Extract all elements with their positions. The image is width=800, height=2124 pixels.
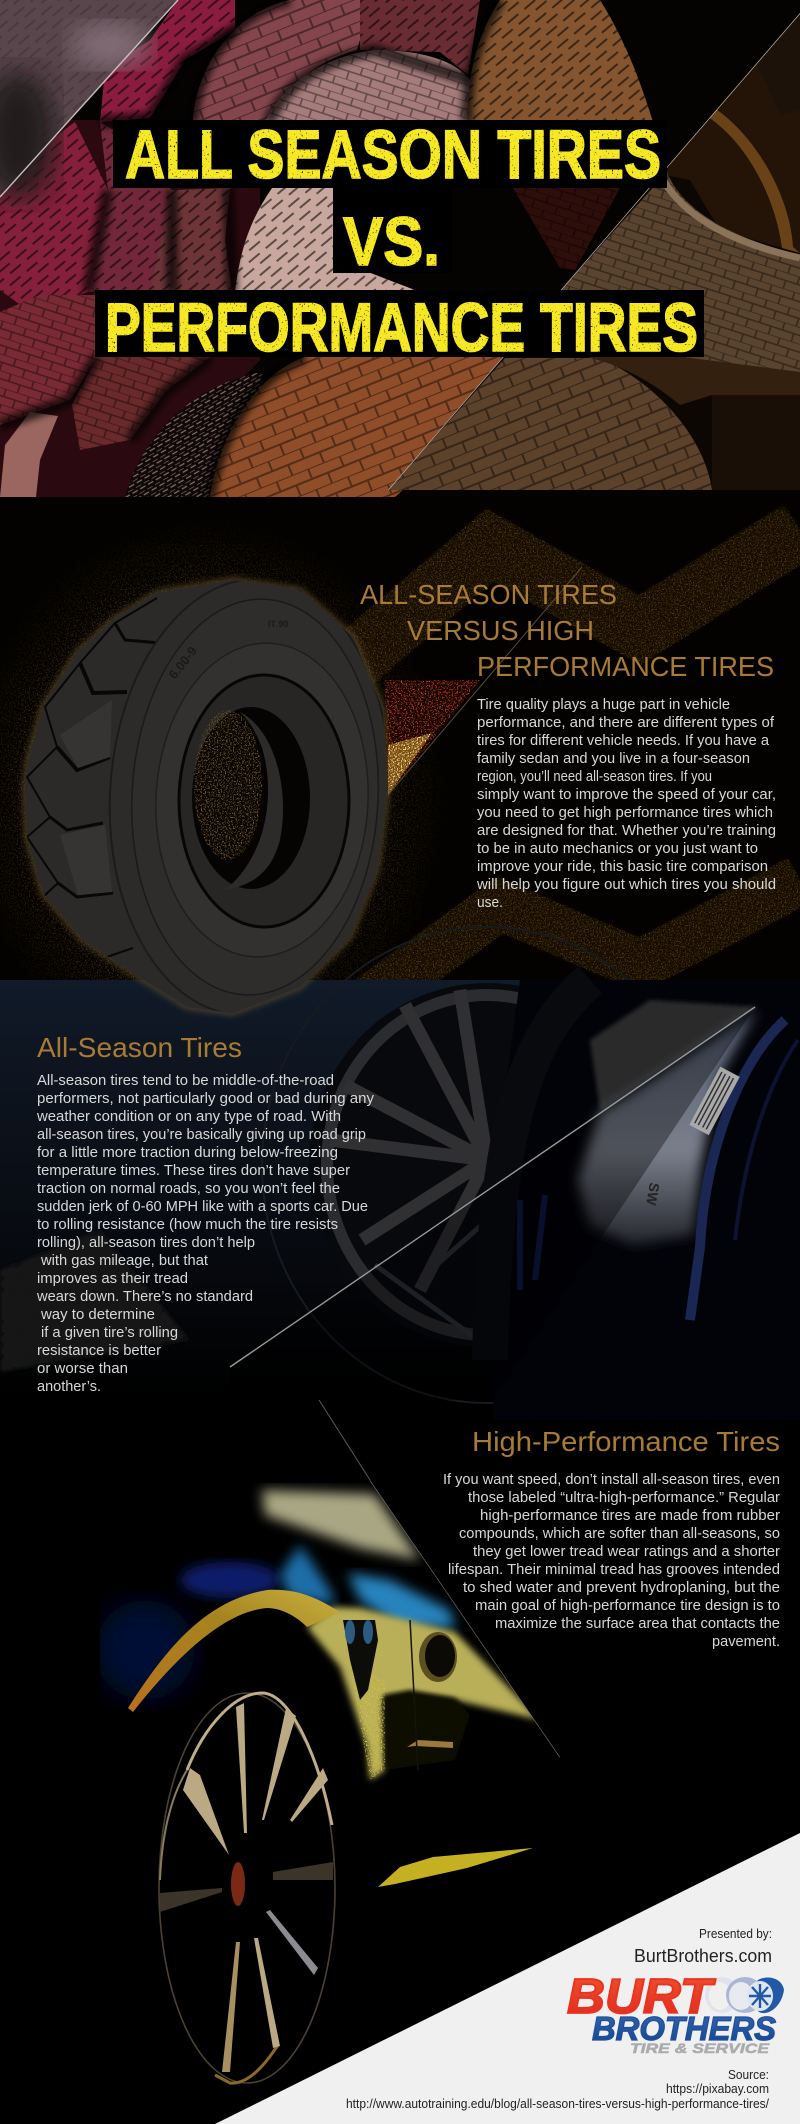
fender lower spatter — [383, 1690, 470, 1770]
rim on right — [490, 980, 800, 1420]
heading: intro: PERFORMANCE TIRES — [477, 651, 774, 682]
text block: high-performance tires: high-performance tires are made from rubber — [480, 1508, 780, 1524]
tire: pink bottom left — [0, 412, 58, 497]
rim on right: SW — [643, 1181, 663, 1207]
tire: dark connecting band — [590, 357, 800, 405]
tire: far left crimson — [0, 122, 108, 312]
title line 2: VS. — [343, 203, 440, 280]
overlay: top-left grey panel — [0, 0, 178, 200]
text block: all-season tires: All-season tires tend to be middle-of-the-road — [37, 1073, 334, 1089]
text block: intro: region, you’ll need all-season tires. If you — [477, 769, 712, 785]
text block: all-season tires — [36, 1073, 375, 1395]
text block: all-season tires: temperature times. These tires don’t have super — [37, 1163, 350, 1179]
text block: high-performance tires: If you want speed, don’t install all-season tires, even — [443, 1472, 780, 1488]
icon: large tire: IT 90 — [268, 619, 289, 629]
tire: lower second — [72, 357, 210, 450]
icon: large tire: 6.00-9 — [166, 644, 200, 682]
tire: crimson top left — [100, 0, 235, 122]
line above car panel — [319, 1400, 370, 1480]
tire sidewall — [108, 580, 384, 1012]
heading: intro: VERSUS HIGH — [407, 615, 594, 646]
tire: inner wheel well — [665, 0, 800, 253]
text block: intro: will help you figure out which tires you should — [476, 877, 776, 893]
panel: footer — [215, 1833, 800, 2124]
tire: large tan tyre — [561, 172, 800, 373]
tire: orange bottom centre — [210, 357, 505, 497]
text block: all-season tires: way to determine — [40, 1307, 155, 1323]
text block: all-season tires: or worse than — [37, 1361, 128, 1377]
text block: intro: simply want to improve the speed of your car, — [477, 787, 776, 803]
text block: intro: are designed for that. Whether you’re training — [477, 823, 776, 839]
divider line — [370, 1480, 560, 1757]
presented by: Presented by: — [699, 1927, 772, 1941]
title — [95, 116, 704, 366]
logo: Burt Brothers: BROTHERS — [592, 2010, 776, 2047]
fuel cap — [419, 1632, 457, 1682]
text block: all-season tires: wears down. There’s no standard — [36, 1289, 253, 1305]
source: Source: — [728, 2068, 769, 2082]
text block: intro: tires for different vehicle needs. If you have a — [477, 733, 770, 749]
wheel — [262, 927, 712, 1403]
text block: all-season tires: rolling), all-season tires don’t help — [37, 1235, 255, 1251]
tire: crimson second — [88, 122, 172, 292]
tire: dark red right of centre — [513, 188, 620, 270]
source: https://pixabay.com — [666, 2082, 769, 2096]
text block: all-season tires: for a little more traction during below-freezing — [37, 1145, 338, 1161]
text block: all-season tires: another’s. — [37, 1379, 101, 1395]
tire: black fine tread — [125, 372, 265, 497]
heading: high-performance tires: High-Performance Tires — [472, 1426, 780, 1457]
text block: high-performance tires — [443, 1472, 780, 1650]
logo: Burt Brothers — [567, 1970, 784, 2056]
wheel — [159, 1693, 335, 2083]
text block: intro: you need to get high performance tires which — [477, 805, 773, 821]
text block: high-performance tires: those labeled “ultra-high-performance.” Regular — [468, 1490, 780, 1506]
text block: high-performance tires: maximize the surface area that contacts the — [495, 1616, 780, 1632]
text block: intro: performance, and there are different types of — [477, 715, 775, 731]
rim ring — [179, 675, 349, 927]
tire: pale centre — [235, 188, 420, 292]
panel: hero tire photo — [0, 0, 800, 497]
fender arc — [128, 1590, 340, 1712]
text block: all-season tires: to rolling resistance (how much the tire resists — [37, 1217, 338, 1233]
heading: intro — [360, 579, 774, 682]
mirror reflection — [343, 1620, 378, 1700]
darker area under divider — [230, 1007, 755, 1400]
text block: all-season tires: sudden jerk of 0-60 MPH like with a sports car. Due — [37, 1199, 368, 1215]
text block: intro: improve your ride, this basic tire comparison — [477, 859, 768, 875]
text block: high-performance tires: compounds, which are softer than all-seasons, so — [459, 1526, 780, 1542]
panel: car photo — [95, 1480, 560, 1887]
diagonal divider — [230, 1007, 755, 1367]
icon: large tire — [20, 572, 401, 1022]
logo: Burt Brothers: TIRE & SERVICE — [630, 2040, 770, 2056]
text block: all-season tires: weather condition or on any type of road. With — [36, 1109, 341, 1125]
source — [346, 2068, 770, 2111]
tire: top right tan — [467, 0, 653, 122]
text block: high-performance tires: main goal of high-performance tire design is to — [475, 1598, 780, 1614]
text block: intro: family sedan and you live in a four-season — [477, 751, 750, 767]
text block: all-season tires: resistance is better — [37, 1343, 161, 1359]
tire: brown third — [150, 188, 232, 292]
tire hole — [192, 707, 310, 890]
title line 1: ALL SEASON TIRES — [125, 116, 661, 193]
text block: high-performance tires: to shed water and prevent hydroplaning, but the — [463, 1580, 780, 1596]
car body panel — [307, 1607, 540, 1780]
text block: intro: to be in auto mechanics or you just want to — [477, 841, 758, 857]
logo: Burt Brothers: BURT — [567, 1970, 716, 2024]
website: BurtBrothers.com — [634, 1946, 772, 1966]
heading: intro: ALL-SEASON TIRES — [360, 579, 617, 610]
text block: high-performance tires: lifespan. Their minimal tread has grooves intended — [448, 1562, 780, 1578]
text block: high-performance tires: pavement. — [712, 1634, 780, 1650]
text block: high-performance tires: they get lower tread wear ratings and a shorter — [473, 1544, 780, 1560]
tire: upper middle tread — [360, 0, 480, 75]
text block: all-season tires: if a given tire’s rolling — [41, 1325, 178, 1341]
panel: intro background — [0, 497, 800, 1080]
text block: all-season tires: all-season tires, you’re basically giving up road grip — [37, 1127, 366, 1143]
tire edge shading — [0, 0, 500, 497]
text block: all-season tires: performers, not particularly good or bad during any — [37, 1091, 375, 1107]
tread lugs — [27, 598, 160, 975]
car window reflections — [262, 1490, 420, 1560]
text block: all-season tires: improves as their tread — [37, 1271, 188, 1287]
tire: lower left — [0, 295, 97, 425]
text block: all-season tires: with gas mileage, but that — [40, 1253, 208, 1269]
tire lower left — [0, 1230, 190, 1372]
text block: intro: use. — [477, 895, 503, 911]
tire: light centre tread — [265, 50, 470, 122]
tire: top centre tread — [193, 0, 372, 122]
source: http://www.autotraining.edu/blog/all-season-tires-versus-high-performance-tires/ — [346, 2097, 770, 2111]
overlay: right brown panel — [380, 0, 800, 497]
sill highlight — [378, 1848, 533, 1887]
fiery patch behind tire — [385, 567, 582, 795]
text block: intro: Tire quality plays a huge part in vehicle — [477, 697, 730, 713]
panel: all-season section background — [0, 927, 800, 1420]
text block: intro — [476, 697, 776, 911]
tire: lower brown tyre — [388, 358, 712, 490]
text block: all-season tires: traction on normal roads, so you won’t feel the — [37, 1181, 340, 1197]
heading: all-season tires: All-Season Tires — [37, 1032, 242, 1063]
